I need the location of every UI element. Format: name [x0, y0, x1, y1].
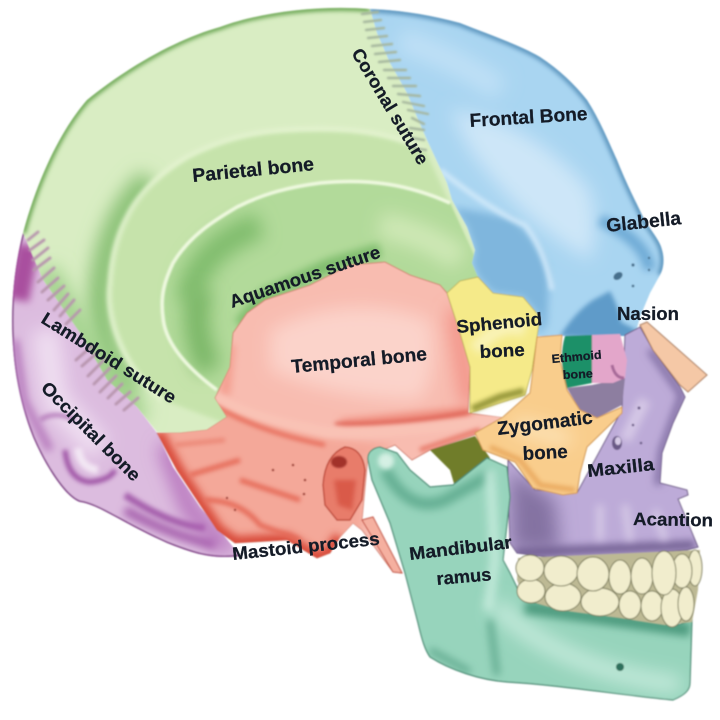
bone: frontal	[370, 9, 663, 340]
label: mastoid process: Mastoid process	[231, 529, 381, 564]
label: squamous suture: Aquamous suture	[227, 242, 383, 312]
bone: mandible	[368, 447, 692, 700]
label: glabella: Glabella	[605, 208, 683, 237]
hollow: infratemporal fossa	[430, 436, 490, 487]
label: frontal bone: Frontal Bone	[469, 104, 588, 132]
label: sphenoid bone line 2: bone	[479, 340, 525, 362]
bone: ethmoid	[562, 335, 592, 388]
bone: lacrimal	[592, 334, 627, 383]
label: mandibular ramus: Mandibular	[408, 532, 513, 564]
label: zygomatic bone line 2: bone	[522, 442, 568, 465]
hollow: orbit floor	[567, 378, 625, 418]
label: ethmoid bone: Ethmoid	[551, 348, 602, 366]
label: parietal bone: Parietal bone	[191, 154, 315, 187]
label: maxilla: Maxilla	[586, 454, 656, 481]
label: sphenoid bone: Sphenoid	[455, 309, 543, 337]
bone: sphenoid	[447, 277, 540, 413]
teeth	[516, 550, 702, 627]
labels	[37, 45, 713, 589]
label: temporal bone: Temporal bone	[290, 344, 428, 378]
bone: occipital	[12, 233, 240, 557]
bone: nasal	[640, 322, 707, 392]
bone: maxilla	[508, 327, 698, 558]
bone: temporal	[157, 262, 505, 573]
label: nasion: Nasion	[617, 304, 679, 324]
label: acantion: Acantion	[633, 509, 713, 530]
suture: coronal	[362, 12, 428, 150]
icon: styloid process	[362, 517, 402, 573]
icon: ear canal	[323, 447, 365, 520]
bone: parietal	[23, 8, 490, 433]
label: coronal suture: Coronal suture	[348, 45, 433, 168]
bone: zygomatic	[475, 335, 622, 495]
label: lambdoid suture: Lambdoid suture	[38, 308, 180, 408]
suture: lambdoid	[28, 232, 138, 410]
label: zygomatic bone: Zygomatic	[496, 407, 594, 440]
label: mandibular ramus line 2: ramus	[436, 564, 492, 589]
label: ethmoid bone line 2: bone	[562, 366, 593, 382]
label: occipital bone: Occipital bone	[37, 378, 145, 485]
